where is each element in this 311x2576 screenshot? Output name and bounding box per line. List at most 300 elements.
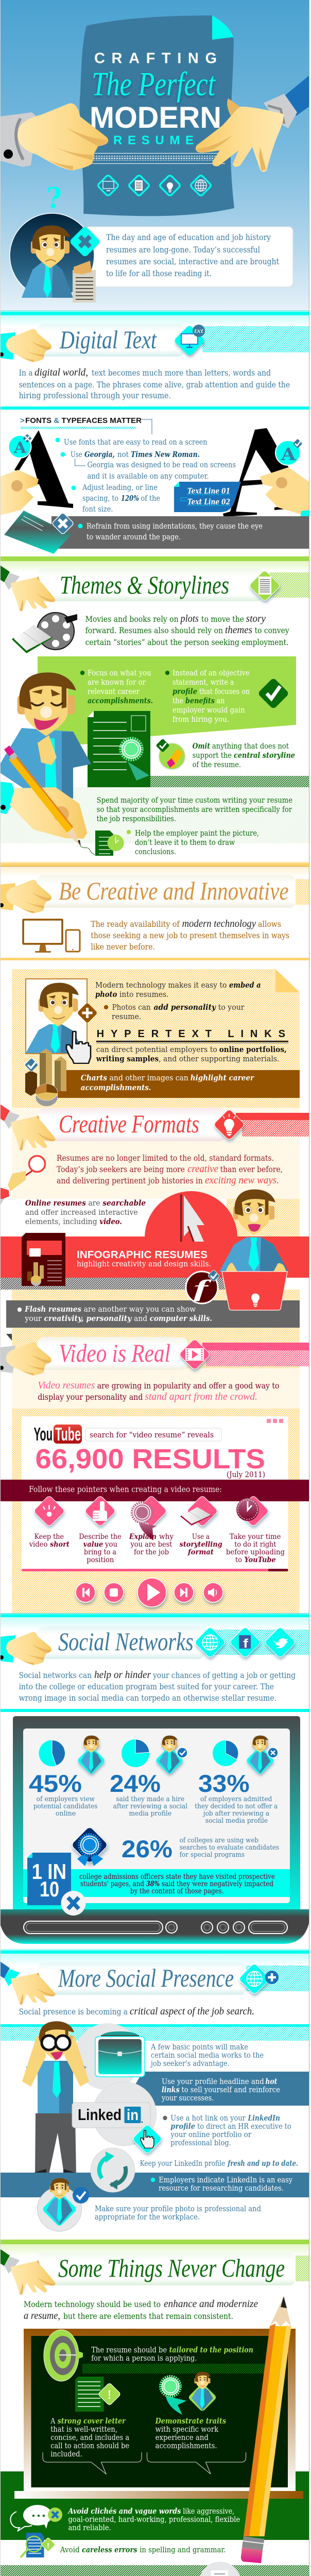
- monitor frame: [13, 1716, 300, 1909]
- teal folder: [4, 511, 72, 554]
- cover letter tip: included.: [50, 2449, 82, 2459]
- stat: 1 in 10 document: [27, 1853, 71, 1905]
- online resumes text: are: [88, 1199, 100, 1208]
- yellow hatch: [12, 1328, 300, 1368]
- section band: [0, 2240, 309, 2257]
- keep fresh tip: Keep your LinkedIn profile: [140, 2159, 225, 2168]
- LinkedIn logo: Linked: [78, 2106, 122, 2124]
- intro paragraph: [24, 2298, 258, 2321]
- cover letter tip: that is well-written,: [50, 2425, 117, 2434]
- left hand holding paper: [0, 103, 108, 171]
- social points text: [150, 2042, 264, 2068]
- subheading bracket: [142, 419, 152, 434]
- intro paragraph: hiring professional through your resume.: [19, 391, 171, 400]
- pink hatch: [206, 1350, 309, 1366]
- icon: facebook diamond: f: [243, 1637, 249, 1651]
- icon: seal with man: [161, 2372, 217, 2415]
- cliches tip: [67, 2506, 240, 2532]
- paper sheet: [80, 15, 234, 216]
- avatar: [155, 1736, 184, 1775]
- intro paragraph: [19, 367, 290, 400]
- profile headline text: links: [162, 2085, 180, 2094]
- blue band 2: [0, 2173, 309, 2197]
- leading example document: [174, 482, 241, 512]
- photo frame with man: [26, 979, 87, 1054]
- badge: A with check: [275, 439, 302, 465]
- omit tip: anything that does not: [212, 742, 289, 751]
- hatched stripe: [270, 572, 309, 598]
- admissions text: said they were negatively impacted: [162, 1880, 273, 1888]
- hypertext text: writing samples: [96, 1055, 159, 1063]
- careless errors tip: careless errors: [82, 2545, 137, 2554]
- corner triangle: [6, 1334, 12, 1341]
- charts text: highlight career: [191, 1074, 254, 1082]
- result date: (July 2011): [227, 1471, 265, 1479]
- traits tip: Demonstrate traits: [155, 2416, 227, 2426]
- icon: document with alert: !: [108, 2388, 111, 2402]
- blue band 1: [131, 2072, 309, 2106]
- font tips: Georgia,: [84, 450, 115, 459]
- flash resumes text: are another way you can show: [84, 1306, 196, 1314]
- big result number: 66,900 RESULTS: [35, 1444, 265, 1475]
- stat: 1 in 10 document: 1 IN: [32, 1859, 66, 1884]
- intro paragraph: Video resumes: [38, 1380, 95, 1391]
- hatched stripe: [202, 326, 309, 352]
- caption: online: [56, 1810, 76, 1818]
- pale hatched background: [12, 1108, 300, 1199]
- hand pointing at heading: [0, 1632, 51, 1665]
- LinkedIn tip: Use a hot link on your: [170, 2113, 246, 2123]
- icon: X circle: [61, 1891, 85, 1916]
- traits tip: experience and: [156, 2433, 209, 2442]
- icon: globe diamond: [194, 1626, 226, 1658]
- board frame: [24, 2329, 296, 2491]
- window buttons: [267, 1419, 283, 1423]
- brown bar: [58, 1070, 300, 1098]
- font tips: of the: [141, 494, 160, 503]
- custom writing text: [97, 796, 292, 823]
- chalkboard: [14, 2329, 303, 2499]
- heading double rule: [96, 1041, 288, 1043]
- panel tips: the: [172, 697, 183, 705]
- LinkedIn tip: profile: [170, 2122, 195, 2131]
- intro paragraph: stand apart from the crowd.: [145, 1391, 257, 1402]
- intro paragraph: [91, 918, 289, 952]
- online resumes text: [25, 1199, 146, 1226]
- icon: film reel and book: [12, 613, 77, 653]
- hand pointing at heading: [0, 1961, 56, 2005]
- man with binoculars: [22, 2021, 89, 2182]
- photo text: add personality: [153, 1003, 217, 1012]
- cover letter tip: concise, and includes a: [50, 2433, 129, 2442]
- closing section: [0, 2562, 309, 2576]
- intro paragraph: [19, 1669, 296, 1703]
- avatar: [77, 1736, 106, 1775]
- big letter A right: [223, 428, 291, 517]
- icon: monitor: [97, 175, 119, 196]
- board hatch: [82, 2364, 265, 2374]
- pointer captions: you are best: [130, 1540, 172, 1549]
- control: play: [137, 1578, 166, 1607]
- cliches tip: like aggressive,: [183, 2506, 234, 2516]
- indentation tip: to wander around the page.: [87, 532, 181, 541]
- flash resumes text: Flash resumes: [24, 1305, 81, 1314]
- admissions text: 38%: [146, 1880, 160, 1888]
- panel tips: profile: [172, 687, 197, 696]
- dark green hatch: [150, 776, 309, 787]
- infographic resume document: [22, 1233, 65, 1286]
- LinkedIn logo: in: [127, 2107, 139, 2124]
- intro paragraph: text becomes much more than letters, words and: [92, 368, 271, 378]
- icon: monitor and tablet: [23, 920, 80, 953]
- icon: check badge: [177, 1748, 187, 1758]
- stat: 24 percent: [110, 1736, 187, 1818]
- font tips: Use: [71, 450, 82, 459]
- grey hatch: [0, 1278, 227, 1290]
- indentation tip: [78, 521, 263, 541]
- heading pill: [38, 1337, 187, 1370]
- title: Modern: MODERN: [90, 101, 221, 134]
- caption: media profile: [129, 1810, 171, 1818]
- caption: of employers admitted: [200, 1795, 272, 1803]
- green hatch: [0, 2565, 309, 2576]
- profile headline text: [161, 2077, 280, 2103]
- stat: 33 percent: [195, 1736, 278, 1825]
- pointer captions: why: [159, 1533, 174, 1541]
- grey circle 2: [93, 2082, 157, 2146]
- cliches tip: and reliable.: [68, 2523, 111, 2532]
- heading pill: [38, 2252, 296, 2285]
- flash resumes text: [18, 1305, 212, 1323]
- red hatch: [242, 1120, 309, 1137]
- omit tip: central storyline: [234, 751, 295, 760]
- font tips: spacing, to: [82, 494, 118, 503]
- pie chart 45 percent: [39, 1740, 65, 1766]
- omit tip: Omit: [193, 742, 210, 751]
- section band: [0, 1613, 309, 1630]
- font tips: not: [117, 450, 129, 459]
- intro paragraph: allows: [258, 919, 281, 929]
- caption: of employers view: [36, 1795, 95, 1803]
- red circle: [145, 1191, 237, 1238]
- caption: social media profile: [205, 1817, 268, 1825]
- pie chart 33 percent: [213, 1740, 238, 1766]
- caption: [113, 1795, 187, 1818]
- charts text: Charts: [81, 1074, 107, 1082]
- intro paragraph: modern technology: [182, 918, 256, 929]
- intro paragraph: Today’s job seekers are being more: [57, 1164, 185, 1174]
- traits tip: accomplishments.: [156, 2441, 217, 2450]
- hand pointing at heading: [0, 565, 56, 612]
- intro paragraph: help or hinder: [94, 1669, 151, 1681]
- panel tips: an: [217, 697, 224, 705]
- dark red banner: [0, 1480, 309, 1501]
- flash resumes text: and: [134, 1315, 147, 1323]
- pointer captions: before uploading: [226, 1548, 285, 1556]
- man at laptop: [219, 1190, 288, 1310]
- admissions text: college admissions officers state they have visited prospective: [79, 1873, 275, 1881]
- panel tips: accomplishments.: [88, 697, 153, 705]
- pink bar: [202, 1343, 309, 1350]
- number: 45%: [29, 1770, 82, 1797]
- pointer: storytelling: [180, 1495, 218, 1527]
- board surface: [31, 2336, 288, 2487]
- intro paragraph: to move the: [201, 614, 244, 624]
- green document with seal: [88, 711, 150, 787]
- worried man avatar: [10, 213, 94, 298]
- intro paragraph: and delivering pertinent job histories in: [57, 1176, 203, 1185]
- LinkedIn logo: .: [141, 2116, 143, 2124]
- intro paragraph: enhance and modernize: [164, 2298, 258, 2310]
- photo text: Modern technology makes it easy to: [95, 981, 227, 990]
- admissions text: students' pages, and: [80, 1880, 144, 1888]
- torn old resume: [73, 261, 96, 302]
- heading pill: [38, 324, 184, 357]
- hatched stripe: [296, 2256, 309, 2281]
- intro text: resumes are long-gone. Today’s successful: [106, 245, 260, 255]
- icon: document with alert: [75, 2377, 121, 2412]
- tailored text: for which a person is applying.: [91, 2353, 197, 2363]
- intro paragraph: [85, 613, 289, 647]
- pale hatched area: [0, 787, 309, 843]
- hatched stripe: [204, 1630, 309, 1655]
- heading pill: [38, 1626, 204, 1659]
- intro text: to life for all those reading it.: [106, 269, 212, 278]
- keep fresh tip: [140, 2159, 298, 2168]
- icon: X badge: [268, 1748, 278, 1758]
- panel tips: from hiring you.: [172, 716, 229, 724]
- charts text: accomplishments.: [81, 1083, 151, 1092]
- infographic resumes text: [77, 1249, 211, 1268]
- intro line: [19, 2006, 254, 2017]
- heading pill: [38, 1962, 246, 1995]
- employers tip: [151, 2175, 293, 2193]
- flash resumes text: creativity, personality: [44, 1314, 132, 1323]
- cover letter tip: [50, 2416, 129, 2459]
- indentation tip: Refrain from using indentations, they cause the eye: [87, 521, 263, 531]
- section band: [0, 311, 309, 327]
- subheading hatch: [21, 427, 136, 429]
- icon: check diamond: [257, 677, 289, 709]
- profile photo tip: [95, 2204, 261, 2222]
- employers tip: Employers indicate LinkedIn is an easy: [159, 2175, 293, 2184]
- LinkedIn tip: your online portfolio or: [170, 2130, 252, 2139]
- cliches tip: goal-oriented, hard-working, professional, flexible: [68, 2515, 240, 2524]
- icon: document diamond: [249, 570, 281, 602]
- employer tip: conclusions.: [135, 848, 176, 856]
- pointer captions: short: [50, 1540, 70, 1549]
- intro paragraph: plots: [180, 613, 199, 624]
- control: volume: [203, 1583, 223, 1602]
- pie chart 24 percent: [122, 1739, 149, 1767]
- hypertext links heading: HYPERTEXT LINKS: [97, 1028, 285, 1040]
- red band: [0, 1236, 309, 1278]
- dotted divider: [93, 153, 225, 164]
- font tips: Times New Roman.: [131, 450, 200, 459]
- employer tip: Help the employer paint the picture,: [135, 829, 259, 838]
- icon: facebook diamond: [229, 1626, 261, 1658]
- grey bar: [6, 1300, 300, 1328]
- social points text: job seeker's advantage.: [150, 2059, 230, 2068]
- icon: document: [128, 175, 150, 196]
- avatar: [246, 1736, 274, 1775]
- photo text: resume.: [112, 1013, 141, 1021]
- panel tips: [80, 669, 250, 724]
- heading: Digital Text: [59, 325, 157, 354]
- number: 24%: [110, 1770, 161, 1797]
- icon: plus diamond: [77, 1003, 98, 1023]
- stat: 26 percent: [122, 1835, 279, 1862]
- YouTube logo: [34, 1423, 82, 1445]
- banner text: Follow these pointers when creating a video resume:: [29, 1485, 222, 1494]
- number: 26%: [122, 1835, 172, 1862]
- LinkedIn tip: to direct an HR executive to: [197, 2122, 291, 2131]
- intro paragraph: forward. Resumes also should rely on: [85, 625, 223, 635]
- omit tip: support the: [193, 752, 232, 760]
- progress bar: [22, 1569, 288, 1571]
- icon: briefcase: [95, 2031, 145, 2077]
- icon: speech bubbles: [10, 2505, 62, 2531]
- icon: refresh circle: [91, 2148, 135, 2192]
- employers tip: resource for researching candidates.: [159, 2183, 284, 2193]
- custom writing text: Spend majority of your time custom writing your resume: [97, 796, 292, 805]
- title: Resume: RESUME: [113, 133, 194, 147]
- pointer captions: position: [87, 1556, 114, 1564]
- custom writing text: so that your accomplishments are written specifically for: [97, 806, 292, 814]
- panel tips: Focus on what you: [88, 669, 151, 677]
- omit tip: of the resume.: [193, 761, 241, 769]
- caption: potential candidates: [33, 1803, 98, 1810]
- font tips: Adjust leading, or line: [82, 483, 158, 492]
- LinkedIn tip: professional blog.: [170, 2138, 231, 2147]
- icon: flash circle: f: [194, 1275, 213, 1301]
- section: Some Things Never Change: [0, 2240, 309, 2576]
- monitor screen: [23, 1728, 290, 1903]
- admissions text: [79, 1873, 275, 1895]
- monitor base: [0, 1909, 309, 1944]
- hand pointing at heading: [0, 880, 51, 913]
- icon: arrow cursor: [180, 1194, 204, 1242]
- intro paragraph: Resumes are no longer limited to the old, standard formats.: [57, 1153, 274, 1163]
- icon: document with magnifier: [21, 2533, 56, 2557]
- heading: Themes & Storylines: [60, 570, 229, 599]
- heading: Video is Real: [59, 1338, 170, 1367]
- question mark: ?: [46, 181, 62, 215]
- hatched stripe: [246, 1965, 309, 1991]
- caption: [33, 1795, 98, 1818]
- paper fold corner: [212, 15, 233, 40]
- hypertext text: [96, 1045, 287, 1063]
- intro paragraph: display your personality and: [38, 1392, 143, 1402]
- icon: X diamond: [51, 512, 74, 535]
- icon: lightbulb: [159, 175, 181, 196]
- social points text: certain social media works to the: [151, 2050, 264, 2060]
- pointer captions: to do it right: [234, 1540, 277, 1549]
- header gradient background: [0, 0, 309, 311]
- panel tips: relevant career: [88, 688, 140, 696]
- intro paragraph: themes: [225, 624, 252, 636]
- pointer captions: for the job: [134, 1548, 169, 1556]
- intro paragraph: story: [246, 613, 266, 624]
- font tips: Use fonts that are easy to read on a screen: [64, 437, 208, 447]
- orange divider: [0, 958, 309, 960]
- caption: they decided to not offer a: [195, 1803, 278, 1810]
- intro paragraph: exciting new ways.: [205, 1175, 279, 1186]
- tailored text: The resume should be: [91, 2345, 167, 2354]
- dark green band: [0, 2471, 309, 2540]
- flash resumes text: your: [24, 1315, 42, 1323]
- pointer captions: Explain: [129, 1533, 157, 1541]
- custom writing text: the job responsibilities.: [97, 815, 176, 823]
- left hand pinching A: [0, 470, 39, 515]
- intro paragraph: creative: [187, 1163, 218, 1175]
- grey circle 1: [74, 2023, 141, 2090]
- pointer: value: [84, 1495, 116, 1527]
- tailored text: tailored to the position: [169, 2345, 253, 2354]
- header section: [0, 0, 309, 311]
- hand pointing at heading: [0, 329, 51, 362]
- photo text: [95, 981, 261, 1021]
- intro text box: [85, 227, 293, 287]
- profile headline text: Use your profile headline and: [162, 2077, 264, 2086]
- icon: magnifier in hand: [0, 1156, 45, 1206]
- intro paragraph: In a: [19, 368, 33, 378]
- search box: search for “video resume” reveals: [90, 1430, 214, 1439]
- intro paragraph: a resume,: [24, 2310, 60, 2321]
- icon: globe: [190, 175, 212, 196]
- leading example document: Text Line 02: [187, 497, 230, 506]
- cyan divider and hatch: [0, 2024, 309, 2041]
- profile photo tip: Make sure your profile photo is professional and: [95, 2204, 261, 2213]
- grey tip bar: [51, 516, 309, 549]
- title: Crafting: CRAFTING: [94, 50, 217, 67]
- pointer captions: you: [105, 1540, 117, 1549]
- yellow hatched panel: [12, 969, 300, 1108]
- player controls: [76, 1578, 223, 1607]
- hand pointing at heading: [0, 2249, 56, 2295]
- section: Social Networks: [0, 1613, 309, 1944]
- omit tip: [193, 742, 295, 769]
- pointer captions: video: [29, 1540, 47, 1549]
- hand with pencil: [0, 745, 95, 855]
- cyan screen strip: [23, 1869, 290, 1897]
- thinking man: [0, 672, 91, 799]
- photo text: into resumes.: [119, 991, 169, 999]
- heading: More Social Presence: [58, 1963, 234, 1992]
- panel tips: are known for or: [88, 679, 146, 687]
- hand pointing at heading: [0, 1343, 51, 1376]
- caption: for special programs: [180, 1851, 245, 1859]
- icon: document with magnifier: !: [47, 2541, 49, 2550]
- pointer: explain: [132, 1495, 167, 1540]
- flash resumes text: computer skills.: [150, 1314, 212, 1323]
- panel tips: benefits: [185, 697, 215, 705]
- cover letter tip: call to action should be: [50, 2441, 129, 2450]
- section: Themes and Storylines: [0, 556, 309, 856]
- intro paragraph: to convey: [255, 625, 289, 635]
- icon: globe diamond: [238, 1963, 279, 1995]
- pointer: take time: [236, 1495, 269, 1527]
- icon row: [97, 175, 212, 196]
- online resumes text: Online resumes: [25, 1199, 86, 1208]
- online resumes text: elements, including: [25, 1218, 97, 1226]
- chalk tray: [14, 2491, 303, 2499]
- icon: eraser with check: [156, 738, 185, 770]
- stat: 45 percent: [29, 1736, 106, 1818]
- pointer captions: Keep the: [34, 1533, 64, 1541]
- hypertext text: , and other supporting materials.: [159, 1055, 279, 1063]
- icon: cursor hand: [66, 1031, 91, 1063]
